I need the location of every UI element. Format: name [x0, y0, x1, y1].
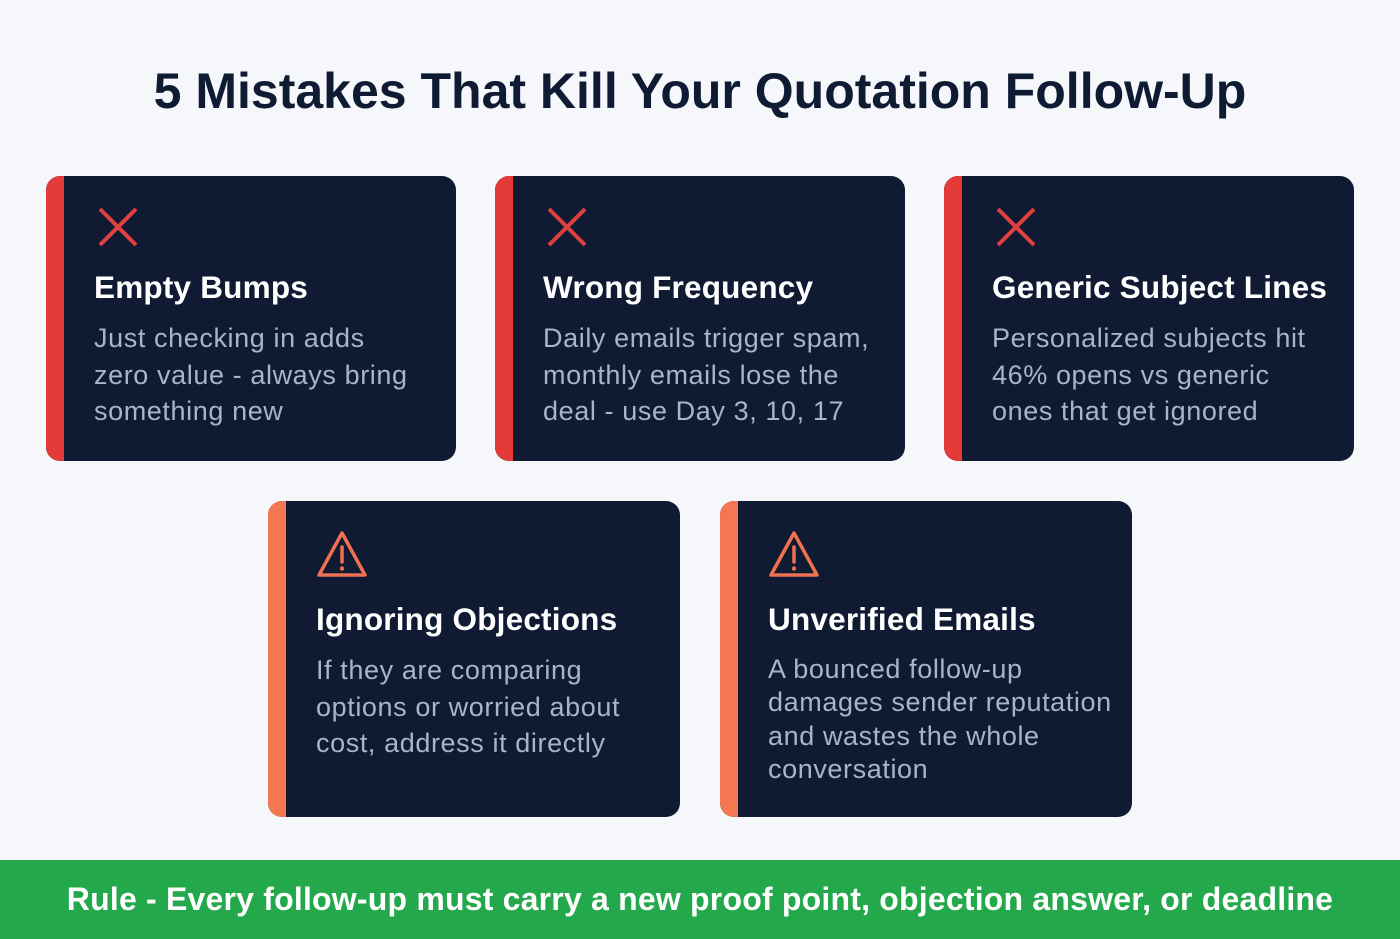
text block: and wastes the whole [768, 721, 1040, 751]
text block: damages sender reputation [768, 687, 1112, 717]
heading: Wrong Frequency [543, 269, 813, 305]
heading: Ignoring Objections [316, 601, 617, 637]
text block [316, 655, 620, 758]
text block: Personalized subjects hit [992, 323, 1306, 353]
text block: 46% opens vs generic [992, 360, 1270, 390]
panel: ignoring objections [268, 501, 680, 817]
panel: empty bumps [46, 176, 456, 461]
text block: Daily emails trigger spam, [543, 323, 869, 353]
text block: cost, address it directly [316, 728, 606, 758]
text block: options or worried about [316, 692, 620, 722]
icon: warning [317, 531, 367, 577]
heading: Generic Subject Lines [992, 269, 1327, 305]
text block [94, 323, 408, 426]
text block: deal - use Day 3, 10, 17 [543, 396, 844, 426]
text block [543, 323, 869, 426]
heading: Empty Bumps [94, 269, 308, 305]
rule banner [0, 860, 1400, 939]
heading: Unverified Emails [768, 601, 1036, 637]
text block: A bounced follow-up [768, 654, 1023, 684]
panel: unverified emails [720, 501, 1132, 817]
icon: red x [996, 208, 1036, 246]
text block: conversation [768, 754, 928, 784]
text block: something new [94, 396, 283, 426]
text block: monthly emails lose the [543, 360, 839, 390]
title: 5 Mistakes That Kill Your Quotation Follow-Up [154, 63, 1246, 119]
icon: red x [98, 208, 138, 246]
text block: Just checking in adds [94, 323, 365, 353]
panel: generic subject lines [944, 176, 1354, 461]
panel: wrong frequency [495, 176, 905, 461]
icon: red x [548, 208, 586, 246]
rule banner: Rule - Every follow-up must carry a new proof point, objection answer, or deadline [67, 881, 1333, 917]
text block [992, 323, 1306, 426]
text block: If they are comparing [316, 655, 582, 685]
text block: ones that get ignored [992, 396, 1258, 426]
icon: warning [769, 531, 819, 577]
text block [768, 654, 1112, 784]
text block: zero value - always bring [94, 360, 408, 390]
